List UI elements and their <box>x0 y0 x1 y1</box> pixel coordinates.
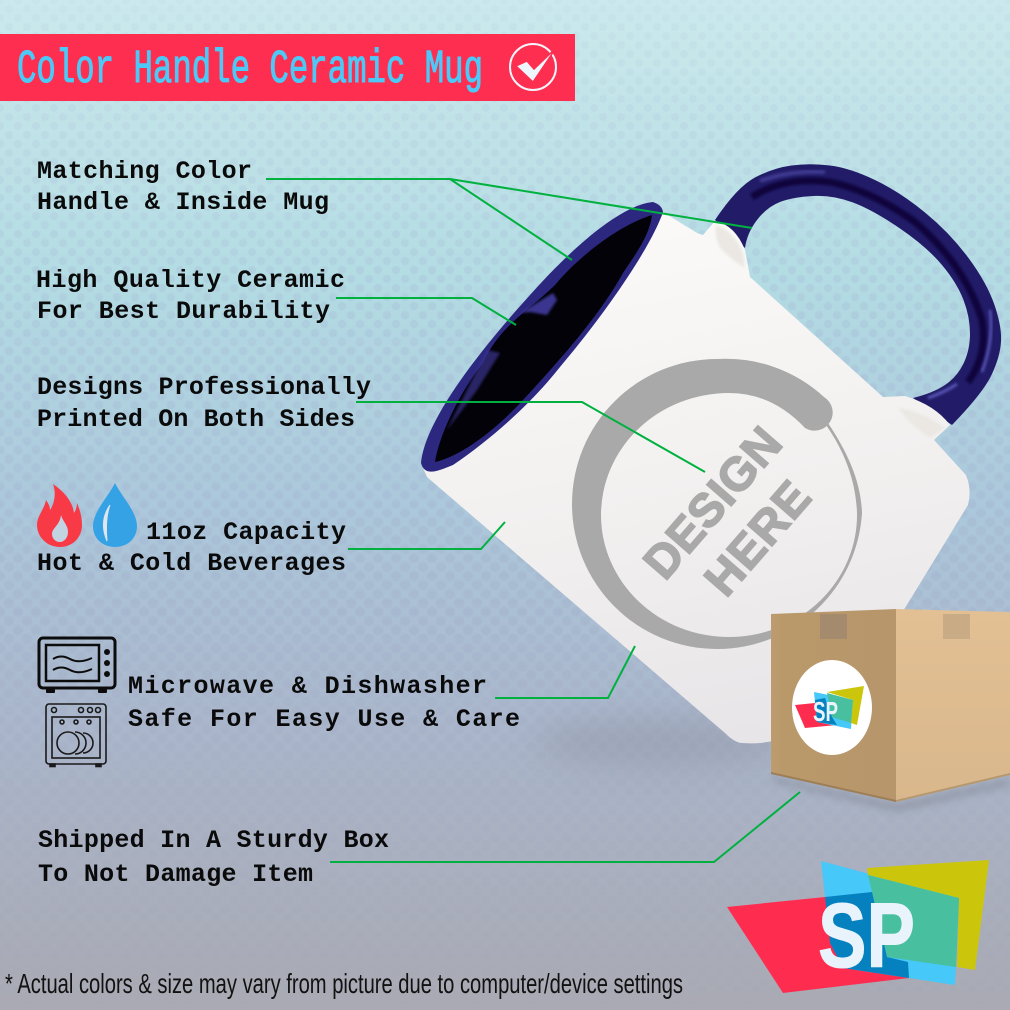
feature: capacity: Hot & Cold Beverages <box>37 549 346 578</box>
feature: ceramic: High Quality Ceramic <box>36 266 345 295</box>
icon: check mark in circle <box>510 44 556 90</box>
feature: shipping: Shipped In A Sturdy Box <box>38 826 389 855</box>
design text: HERE <box>694 470 821 606</box>
feature: printing: Printed On Both Sides <box>37 405 355 434</box>
disclaimer: * Actual colors & size may vary from picture due to computer/device settings <box>5 968 683 999</box>
logo: SP: SP <box>818 885 915 987</box>
box sticker <box>792 660 872 755</box>
illustration: cardboard box <box>771 609 1010 802</box>
feature: shipping <box>38 826 389 889</box>
shadow under mug <box>535 716 785 768</box>
box left face <box>771 609 896 802</box>
feature: printing <box>37 373 371 434</box>
feature: capacity: 11oz Capacity <box>146 518 346 547</box>
feature: matching color: Matching Color <box>37 157 252 186</box>
feature: shipping: To Not Damage Item <box>38 860 313 889</box>
illustration: mug <box>421 164 1001 743</box>
title text: Color Handle Ceramic Mug <box>17 44 483 97</box>
feature: matching color <box>37 157 329 217</box>
callout lines <box>266 179 800 862</box>
feature: ceramic <box>36 266 345 326</box>
icon: microwave <box>39 638 115 693</box>
feature: ceramic: For Best Durability <box>37 297 330 326</box>
box sticker: SP <box>813 696 838 727</box>
icon: flame <box>37 484 82 547</box>
feature: printing: Designs Professionally <box>37 373 371 402</box>
feature: microwave and dishwasher safe <box>128 672 520 734</box>
design text: DESIGN <box>633 416 792 589</box>
design placeholder <box>572 359 862 649</box>
feature: microwave and dishwasher safe: Safe For Easy Use & Care <box>128 705 520 734</box>
mug handle <box>715 164 1001 425</box>
title banner <box>0 34 575 101</box>
box shadow <box>771 776 1010 812</box>
logo: SP <box>727 860 989 993</box>
mug rim and inside <box>421 202 663 472</box>
icon: dishwasher <box>46 704 106 766</box>
mug handle joints <box>716 225 945 438</box>
icon: water drop <box>93 483 137 547</box>
feature: matching color: Handle & Inside Mug <box>37 188 329 217</box>
feature: microwave and dishwasher safe: Microwave & Dishwasher <box>128 672 487 701</box>
box right face <box>896 609 1010 802</box>
feature: capacity <box>37 518 346 578</box>
mug body <box>421 212 970 743</box>
